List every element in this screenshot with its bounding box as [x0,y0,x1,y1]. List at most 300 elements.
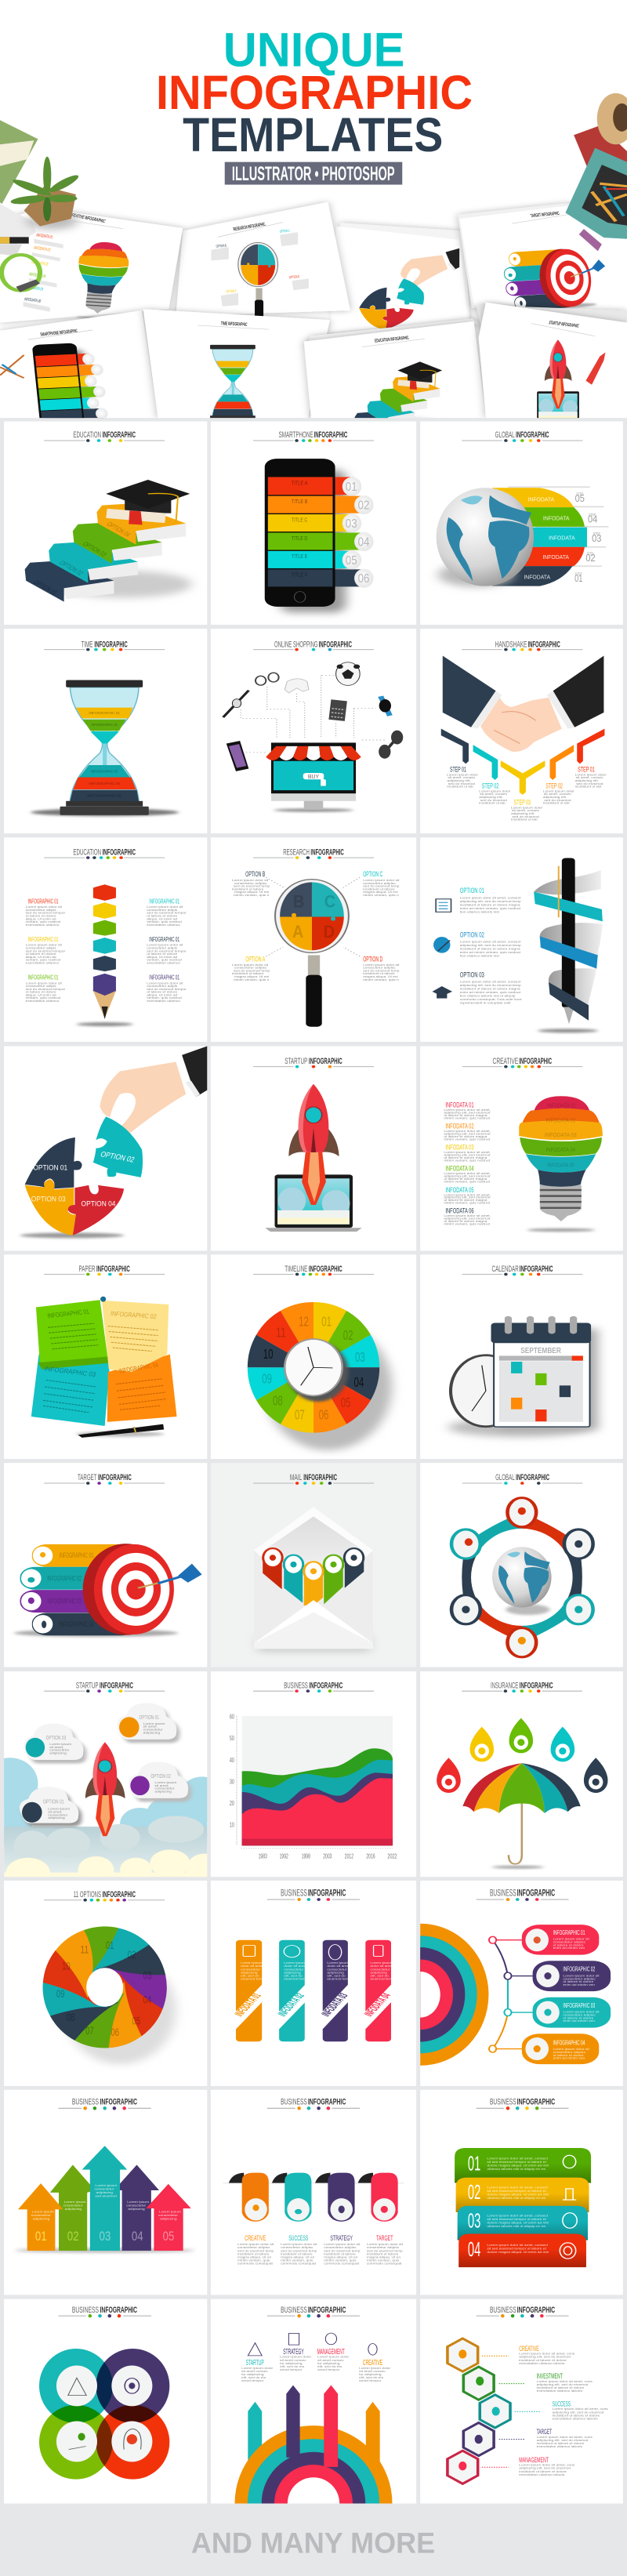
heading [253,847,374,859]
cloud callout option 03 [24,1724,87,1763]
heading: INFOGRAPHIC [308,2096,346,2106]
infodata text list: ut labore et dolore magna [444,1177,487,1181]
heading: CREATIVE [493,1056,518,1065]
step labels with text: sit amet, consec [480,793,507,796]
ribbon columns text: sed do eiusmod temp [237,2249,274,2252]
step labels with text: incididunt ut lab [543,801,570,804]
swirl numbers: 07 [85,2024,94,2037]
banner body text: elit, sed do [284,1974,303,1977]
heading: STARTUP [285,1056,307,1065]
hexagon labels: Lorem ipsum dolor sit amet, cons [553,2407,609,2411]
banner body text: Lorem ipsum [241,1961,263,1965]
cloud callout option 01: adipiscing [143,1731,161,1734]
ribbon columns text: commodo consequat [324,2262,360,2265]
step labels with text: sit amet, consec [512,809,539,812]
arrow body text: consectetur [94,2187,114,2190]
sheet: creative [0,208,183,323]
right labels: Lorem ipsum dolor sit [147,905,183,909]
step labels: 05 [575,492,585,504]
panel: pencil education infographic [4,837,207,1042]
hexagon labels: adipiscing elit, sed do eiusmod [537,2438,589,2442]
banner body text: dolor sit amet [370,1965,393,1968]
bulb labels: INFODATA 01 [547,1102,576,1109]
ribbon columns text: incididunt ut labore [281,2252,313,2255]
heading [44,1472,165,1485]
illustration: store monitor with awning: BUY [308,774,319,779]
prop: red paper and wooden bowl [574,93,627,172]
prop: pen and smartwatch [0,237,40,292]
illustration: segmented pencil [77,884,132,1026]
pill 02: ut labore et dolore [563,1980,594,1983]
option labels [232,869,400,981]
panel: pencil education infographic: INFOGRAPHIC 01 [149,898,179,905]
arrow body text: Lorem ipsum [64,2200,86,2204]
option labels: Lorem ipsum dolor sit [232,879,269,882]
illustration: orange note [107,1355,177,1422]
arrow numbers [35,2229,174,2244]
heading: INFOGRAPHIC [309,1056,342,1065]
banner body text: Lorem ipsum [327,1961,350,1965]
note titles: INFOGRAPHIC 01 [47,1308,90,1320]
heading [267,2096,360,2110]
option text: adipiscing elit, sed do eiusmod temp [460,900,522,903]
heading [44,1264,165,1275]
puzzle labels: OPTION 01 [33,1163,67,1172]
book labels: OPTION 02 [57,560,85,577]
sheet: handshake mini infographic [359,249,459,330]
heading: INFOGRAPHIC [96,1264,130,1273]
heading: GLOBAL [495,430,515,440]
ribbon labels: INFODATA [549,535,575,542]
ribbon labels [524,496,575,581]
cloud callout option 03: OPTION 03 [46,1735,66,1741]
rows 3 and 4 [4,837,623,1251]
heading: CALENDAR [492,1264,519,1273]
clock sector numbers: 07 [295,1407,305,1422]
option labels: Lorem ipsum dolor sit [363,879,400,882]
step labels with text: sed do eiusmod [480,799,508,802]
heading [462,1056,582,1068]
hexagon labels: incididunt ut labore et dolore [537,2386,585,2389]
swirl numbers: 02 [128,1948,136,1961]
cloud callout option 01 [118,1703,179,1743]
heading: BUSINESS [72,2096,99,2106]
step labels: 04 [588,513,597,525]
sheet: education: EDUCATION INFOGRAPHIC [374,335,409,343]
arrow body text: adipiscing [33,2217,50,2220]
panel: insurance infographic [420,1671,623,1877]
option labels: minim veniam, quis n [363,978,400,981]
clock sector numbers: 09 [262,1370,272,1386]
title: unique infographic templates: TEMPLATES [183,107,443,161]
infodata text list: INFODATA 02 [445,1122,474,1130]
column text: tur adipiscing [241,2373,264,2376]
panel: half ring pills infographic [420,1881,623,2086]
arrow body text: adipiscing [160,2217,177,2220]
illustration: five arrows [15,2146,194,2252]
icon: wristwatch [223,691,248,717]
card text [487,2157,549,2254]
option labels: OPTION D [363,955,382,963]
heading [267,1888,360,1901]
infodata text list: adipiscing elit, sed eiusmod [444,1111,491,1114]
option labels: Lorem ipsum dolor sit [363,963,400,967]
column text: elit, sed do eiu [317,2364,342,2368]
column text: elit, sed do eiu [359,2376,384,2379]
lens letters: D [324,922,335,942]
step labels with text: adipiscing elit, [511,812,535,815]
pill 02: consectetur adipisc [563,1977,596,1980]
hexagon labels: exercitation ullamco laboris [537,2445,583,2448]
heading: INFOGRAPHIC [517,2096,555,2106]
illustration: eleven petal swirl [34,1919,176,2064]
phone titles and numbers: TITLE F [292,571,307,579]
step labels with text [447,765,607,821]
panel: stacked cards infographic [420,2090,623,2295]
cloud callout option 03: consectetur [49,1748,70,1751]
chart y axis labels [230,1714,234,1829]
heading: INFOGRAPHIC [319,639,352,649]
infodata text list: minim veniam, quis nostrud [444,1180,491,1183]
right labels: sed do eiusmod tempor [147,949,187,952]
step labels: STEP [576,492,583,496]
heading: INFOGRAPHIC [100,2096,137,2106]
step labels: STEP [593,532,600,535]
option text: tion ullamco laboris nisi [460,954,499,957]
heading [253,639,374,651]
panel: creative bulb infographic [420,1046,623,1251]
card text: Lorem ipsum dolor sit amet, consect [487,2214,549,2218]
step labels: STEP [586,551,594,556]
bulb labels [545,1102,577,1169]
column text: elit, sed do eiu [280,2364,305,2368]
panel: smartphone infographic: TITLE C [292,517,307,524]
banner body text: dolor sit amet [327,1965,350,1968]
phone titles and numbers [292,480,308,579]
left labels: consectetur adipis [26,985,56,988]
arrow body text: adipiscing [128,2208,145,2211]
option labels: Lorem ipsum dolor sit [232,963,269,967]
illustration: umbrella [462,1763,581,1868]
banner bars [232,1940,395,2041]
banner body text: consectetur [241,1968,261,1971]
option text: enim ad minim veniam, quis nostrud [460,907,521,910]
step labels: 02 [585,552,596,564]
heading [462,639,582,651]
hourglass labels: INFOGRAPHIC 03 [91,769,118,774]
banner body text: Lorem ipsum [370,1961,393,1965]
left labels: Lorem ipsum dolor sit [26,905,63,909]
hourglass labels: INFOGRAPHIC 01 [89,711,121,715]
heading: INFOGRAPHIC [103,1889,136,1899]
target labels [47,1552,93,1628]
right labels: veniam, quis nostrud [147,920,183,923]
banner icons [243,1945,383,1960]
sheet: creative: INFODATA 05 [26,285,44,292]
option text: Lorem ipsum dolor sit amet, consect [460,980,521,983]
illustration: yellow note [102,1301,169,1372]
sheet: creative: INFODATA 02 [33,246,51,252]
heading: INFOGRAPHIC [516,430,549,440]
illustration: ribbon segments behind globe [437,487,609,587]
option labels: sed do eiusmod temp [234,884,270,887]
badge: illustrator and photoshop [225,162,402,185]
clock sector numbers: 08 [273,1393,283,1408]
panel: timeline clock infographic: 04 [354,1374,364,1390]
hourglass labels: INFOGRAPHIC 04 [89,782,121,785]
heading: INFOGRAPHIC [100,1680,133,1690]
banner body text: dolor sit amet [241,1965,264,1968]
right labels: exercitation ullamco [147,961,181,964]
infodata text list: minim veniam, quis nostrud [444,1116,491,1119]
sheet: research: RESEARCH INFOGRAPHIC [232,221,266,232]
step labels with text: Lorem ipsum dolor [479,789,511,793]
left labels: sed do eiusmod tempor [26,912,66,915]
heading [267,2305,360,2317]
ribbon columns text: commodo consequat [281,2262,317,2265]
sheet: research: OPTION C [279,229,291,234]
illustration: green note [36,1300,109,1370]
banner body text: elit, sed do [370,1974,390,1977]
clock sector numbers: 01 [321,1314,332,1330]
sheet: education [304,318,486,437]
panel: mail infographic [211,1463,416,1667]
infodata text list: Lorem ipsum dolor sit amet, [444,1108,491,1112]
card text: Lorem ipsum dolor sit amet, consect [487,2186,549,2189]
step labels with text: sed do eiusmod [576,782,603,785]
step labels with text: sed do eiusmod [544,799,571,802]
heading: INFOGRAPHIC [94,639,128,649]
heading: BUSINESS [281,2305,307,2315]
column text: smod tempor [359,2379,382,2382]
banner body text: eiusmod temp [370,1978,395,1980]
infodata text list: Lorem ipsum dolor sit amet, [444,1214,491,1217]
option text: tion ullamco laboris nisi [460,910,499,913]
puzzle labels [31,1150,136,1208]
left labels: ut labore et dolore [26,914,56,917]
heading [477,2096,569,2110]
heading [462,1264,582,1275]
heading: INFOGRAPHIC [308,2305,346,2315]
pill 01: enim ad minim ven [553,1947,585,1950]
option text: enim ad minim veniam, quis nostrud [460,991,521,994]
step labels with text: Lorem ipsum dolor [447,773,479,776]
illustration: wall clock behind calendar [448,1355,592,1437]
chart x axis labels: 1983 [259,1853,267,1860]
heading: BUSINESS [284,1680,308,1690]
option labels: consectetur adipisc [363,882,396,885]
prop: potted plant [9,157,82,230]
sheet: target: TARGET INFOGRAPHIC [530,210,560,219]
infodata text list: ut labore et dolore magna [444,1220,487,1223]
arrow body text: Lorem ipsum [32,2210,54,2213]
puzzle labels: OPTION 04 [82,1199,116,1208]
swirl numbers: 05 [132,2015,140,2027]
panel: 11 options swirl infographic: 04 [143,1994,152,2006]
option labels: consectetur adipisc [234,882,266,885]
illustration: stacked cards [455,2148,591,2267]
banner body text: consectetur [370,1968,390,1971]
ribbon labels: INFODATA [543,515,570,522]
column labels: MANAGEMENT [317,2348,345,2356]
banner body text: eiusmod temp [241,1978,265,1980]
left labels: aliqua. Ut enim ad [26,917,56,920]
panel: pencil education infographic: INFOGRAPHIC 01 [28,898,59,905]
step labels with text: sed do eiusmod [513,815,540,818]
prop: eraser [579,229,602,251]
panel: calendar infographic [420,1254,623,1459]
phone titles and numbers: TITLE E [292,553,307,561]
step labels: 01 [574,572,582,584]
panel: pencil education infographic: INFOGRAPHIC 01 [149,974,179,981]
hexagon labels [519,2346,609,2476]
right labels [147,898,187,1003]
heading: INFOGRAPHIC [100,2305,137,2315]
cloud callout option 01 lower: consectetur [48,1813,68,1816]
option labels: sed do eiusmod temp [363,884,400,887]
sheet: time: TIME INFOGRAPHIC [220,321,248,327]
panel: stacked cards infographic: 03 [468,2210,480,2233]
banner body text: elit, sed do [241,1974,259,1977]
heading [58,2096,151,2110]
title: unique infographic templates [156,22,473,161]
hexagon labels: Lorem ipsum dolor sit amet, cons [537,2435,593,2439]
banner body text: Lorem ipsum [284,1961,306,1965]
option labels: magna aliqua. Ut eni [234,975,269,978]
chart x axis labels: 1992 [280,1853,288,1860]
heading [462,1472,582,1485]
option text: Lorem ipsum dolor sit amet, consect [460,896,521,899]
heading: INFOGRAPHIC [98,1472,132,1482]
banner body text: adipiscing [241,1971,258,1974]
banner body text: consectetur [284,1968,304,1971]
step labels with text: STEP 02 [482,782,498,790]
pill 04 [522,2034,599,2064]
note titles: INFOGRAPHIC 03 [44,1366,96,1379]
card text: Lorem ipsum dolor sit amet, consect [487,2157,549,2161]
illustration: layered light bulb [519,1096,603,1232]
step labels with text: incididunt ut lab [511,818,538,821]
ribbon columns text: magna aliqua. Ut en [281,2255,315,2259]
infodata text list: INFODATA 04 [445,1164,474,1173]
illustration: hexagon chain [448,2338,510,2483]
icon: mobile phone [227,741,248,771]
infodata text list: ut labore et dolore magna [444,1156,487,1159]
option labels: consectetur adipisc [234,966,266,969]
left labels: veniam, quis nostrud [26,920,61,923]
illustration: calendar [491,1316,598,1430]
panel: puzzle hand infographic [4,1046,207,1251]
swirl numbers: 01 [106,1939,114,1951]
heading: INFOGRAPHIC [314,430,347,440]
step labels with text: sed do eiusmod [448,782,476,785]
heading [44,639,165,651]
ribbon columns text: incididunt ut labore [324,2252,356,2255]
step labels with text: sit amet, consec [576,776,603,779]
step labels with text: Lorem ipsum dolor [511,806,543,809]
arrow body text: consectetur [31,2213,51,2217]
step labels with text: sit amet, consec [544,793,571,796]
card text: sit sed eiusmod tempor ut labore et [487,2218,547,2221]
heading: TARGET [78,1472,97,1482]
chart x axis labels: 2003 [323,1853,332,1860]
cloud callout option 01: consectetur [143,1728,163,1731]
clock sector numbers: 12 [299,1314,309,1330]
swirl numbers: 11 [81,1943,89,1955]
prop: teal pencil box [565,148,627,239]
ribbon columns text: consectetur adipisc [237,2246,270,2249]
panel: area chart infographic: 10 [230,1822,234,1829]
heading [253,430,374,442]
banner body text: adipiscing [327,1971,345,1974]
option labels: sed do eiusmod temp [234,969,270,972]
infodata text list: adipiscing elit, sed eiusmod [444,1196,491,1199]
infodata text list: Lorem ipsum dolor sit amet, [444,1151,491,1154]
heading: INFOGRAPHIC [310,847,344,857]
hexagon labels: exercitation ullamco laboris [519,2473,565,2476]
option text: Lorem ipsum dolor sit amet, consect [460,940,521,943]
clock sector numbers: 05 [341,1395,350,1410]
panel: pen ribbon infographic [420,837,623,1042]
swirl numbers: 10 [62,1960,71,1972]
ribbon labels: INFODATA [542,554,569,561]
step labels with text: STEP 01 [578,765,595,774]
cloud callout option 03: adipiscing [49,1751,67,1754]
pill 03: enim ad minim ven [563,2019,596,2023]
banner labels: INFODATA 03 [318,1991,350,2018]
ribbon columns text: minim veniam, quis [237,2259,270,2262]
ribbon columns text: CREATIVE [245,2235,266,2243]
sheet: creative: INFODATA 03 [31,260,49,267]
arrow numbers: 01 [35,2229,47,2244]
option labels: magna aliqua. Ut eni [363,975,398,978]
lens letters: C [324,892,335,911]
cloud callout option 02: adipiscing [154,1790,172,1793]
illustration: stack of books with cap [25,480,192,602]
left labels: consectetur adipis [26,946,56,949]
icons above columns [248,2333,377,2356]
heading: INFOGRAPHIC [520,1264,553,1273]
step numbers: 04 [358,535,369,549]
option text: adipiscing elit, sed do eiusmod temp [460,944,522,947]
option text: reprehenderit in voluptate velit [460,1001,512,1004]
heading: INFOGRAPHIC [516,1472,549,1482]
panel: area chart infographic [211,1671,416,1877]
infodata text list [444,1101,491,1225]
option text: OPTION 02 [460,931,484,939]
clock sector numbers: 06 [319,1407,328,1422]
option text: commodo consequat. Duis aute irure [460,998,523,1001]
swirl numbers: 08 [67,2011,74,2023]
pill 03: ut labore et dolore [563,2016,594,2019]
arrow body text: sed eiusmod [95,2194,117,2197]
arrow body text: Lorem ipsum [127,2200,150,2204]
right labels: veniam, quis nostrud [147,996,183,1000]
column labels: STRATEGY [283,2348,304,2356]
pill 03 [533,1997,611,2028]
panel: arrows infographic [4,2090,207,2295]
step numbers: 01 [346,481,357,494]
step numbers: 06 [358,572,369,586]
sheet: creative: CREATIVE INFOGRAPHIC [69,212,107,224]
ribbon columns text: commodo consequat [367,2262,403,2265]
sheet: creative: INFODATA 06 [24,297,42,304]
column text: sit amet consec [317,2358,345,2362]
arrow body text: Lorem ipsum [95,2184,118,2187]
infodata text list: Lorem ipsum dolor sit amet, [444,1130,491,1133]
footer: and many more: AND MANY MORE [191,2527,435,2559]
icon: document [436,899,451,912]
